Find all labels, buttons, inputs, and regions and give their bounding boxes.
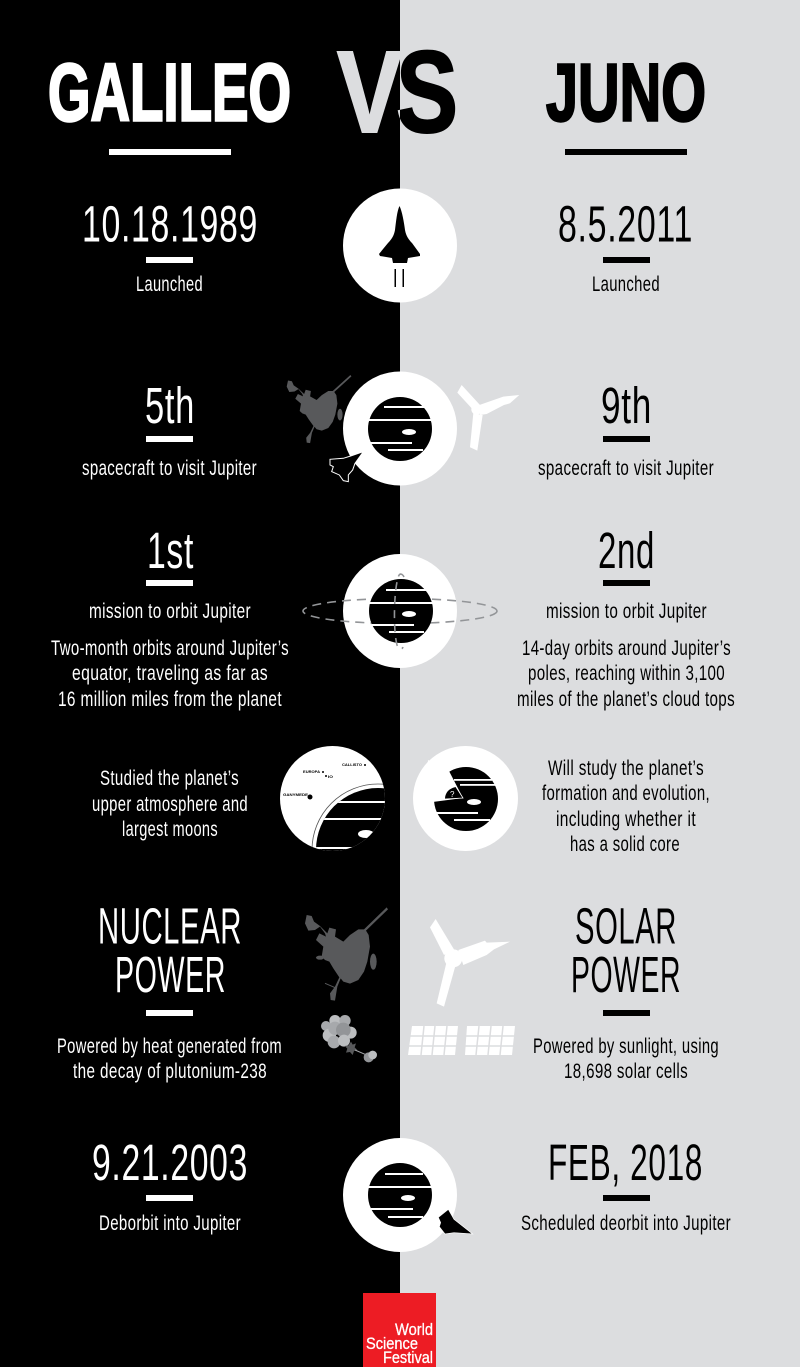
Galileo orbit text: mission to orbit Jupiter <box>89 600 251 623</box>
logo: World Science Festival: World <box>395 1320 433 1339</box>
Juno power text: Powered by sunlight, using <box>533 1035 719 1058</box>
icon: launching shuttle <box>343 188 457 302</box>
icon: Jupiter deorbit <box>343 1138 473 1252</box>
logo: World Science Festival: Festival <box>383 1348 433 1367</box>
Juno visit rank: spacecraft to visit Jupiter <box>538 457 714 480</box>
Galileo deorbit: 9.21.2003 <box>92 1134 248 1191</box>
Juno visit rank: 9th <box>601 377 652 434</box>
Galileo study text: largest moons <box>122 818 218 841</box>
Juno study text: Will study the planet’s <box>548 757 704 780</box>
Juno orbit text <box>517 522 735 711</box>
Galileo study text <box>92 767 248 841</box>
Galileo power text <box>57 898 282 1083</box>
Juno power text <box>533 898 719 1083</box>
icon: Juno spacecraft large <box>430 919 510 1007</box>
heading: VS <box>336 50 456 134</box>
Galileo orbit text: 16 million miles from the planet <box>58 688 282 711</box>
Galileo deorbit: Deborbit into Jupiter <box>99 1212 241 1235</box>
Galileo power text: the decay of plutonium-238 <box>73 1060 267 1083</box>
logo: World Science Festival <box>363 1293 436 1367</box>
Galileo visit rank <box>82 377 257 480</box>
Juno launch date: Launched <box>592 273 660 296</box>
Galileo deorbit <box>92 1134 248 1235</box>
Juno power text: SOLAR <box>575 898 677 954</box>
icon: Jupiter and moons: GANYMEDE <box>283 792 308 797</box>
Juno visit rank <box>538 377 714 480</box>
heading: VS: S <box>396 27 458 157</box>
Juno orbit text: poles, reaching within 3,100 <box>528 662 725 685</box>
Juno study text: has a solid core <box>570 833 680 856</box>
icon: Jupiter with shuttle <box>330 372 457 486</box>
Galileo visit rank: 5th <box>145 377 195 434</box>
Juno launch date <box>558 196 693 296</box>
panel: Juno background <box>400 0 800 1367</box>
heading: Juno: JUNO <box>546 48 706 138</box>
Galileo visit rank: spacecraft to visit Jupiter <box>82 457 257 480</box>
heading: Galileo: GALILEO <box>48 48 291 138</box>
Galileo orbit text <box>51 522 289 711</box>
Juno power text: POWER <box>571 946 681 1003</box>
Galileo orbit text: Two-month orbits around Jupiter’s <box>51 637 289 660</box>
Juno deorbit: FEB, 2018 <box>548 1134 703 1191</box>
icon: Jupiter with orbits <box>303 554 497 668</box>
Juno deorbit <box>521 1134 731 1235</box>
heading: VS: S <box>396 27 458 157</box>
Galileo launch date: 10.18.1989 <box>82 196 258 252</box>
heading: Juno <box>546 48 706 155</box>
icon: plutonium decay <box>321 1015 377 1062</box>
icon: Galileo spacecraft small <box>287 375 351 443</box>
Galileo power text: NUCLEAR <box>98 898 242 954</box>
icon: Jupiter core <box>413 746 518 851</box>
Galileo orbit text: equator, traveling as far as <box>72 662 268 685</box>
icon: solar panels <box>408 1026 515 1055</box>
panel: Galileo background <box>0 0 400 1367</box>
Galileo power text: POWER <box>115 946 226 1003</box>
Juno orbit text: mission to orbit Jupiter <box>546 600 707 623</box>
Galileo launch date: Launched <box>136 273 203 296</box>
logo: World Science Festival: Science <box>366 1334 418 1353</box>
icon: Jupiter and moons: EUROPA <box>303 769 320 774</box>
Juno study text: formation and evolution, <box>542 782 710 805</box>
Galileo launch date <box>82 196 258 296</box>
Galileo study text: Studied the planet’s <box>100 767 239 790</box>
Juno launch date: 8.5.2011 <box>558 196 693 252</box>
icon: Jupiter and moons: IO <box>328 774 333 779</box>
icon: Jupiter and moons <box>280 746 385 851</box>
icon: Jupiter core: ? <box>450 790 455 799</box>
icon: Galileo spacecraft large <box>305 907 388 1001</box>
Galileo study text: upper atmosphere and <box>92 793 248 816</box>
icon: Juno spacecraft small <box>457 385 519 451</box>
Galileo power text: Powered by heat generated from <box>57 1035 282 1058</box>
Juno power text: 18,698 solar cells <box>564 1060 688 1083</box>
icon: Jupiter and moons: CALLISTO <box>342 762 362 767</box>
Galileo orbit text: 1st <box>147 522 194 579</box>
heading: VS: V <box>337 27 402 157</box>
Juno orbit text: 2nd <box>598 522 655 579</box>
Juno study text: including whether it <box>556 808 696 831</box>
heading: Galileo <box>48 48 291 155</box>
Juno study text <box>542 757 710 856</box>
